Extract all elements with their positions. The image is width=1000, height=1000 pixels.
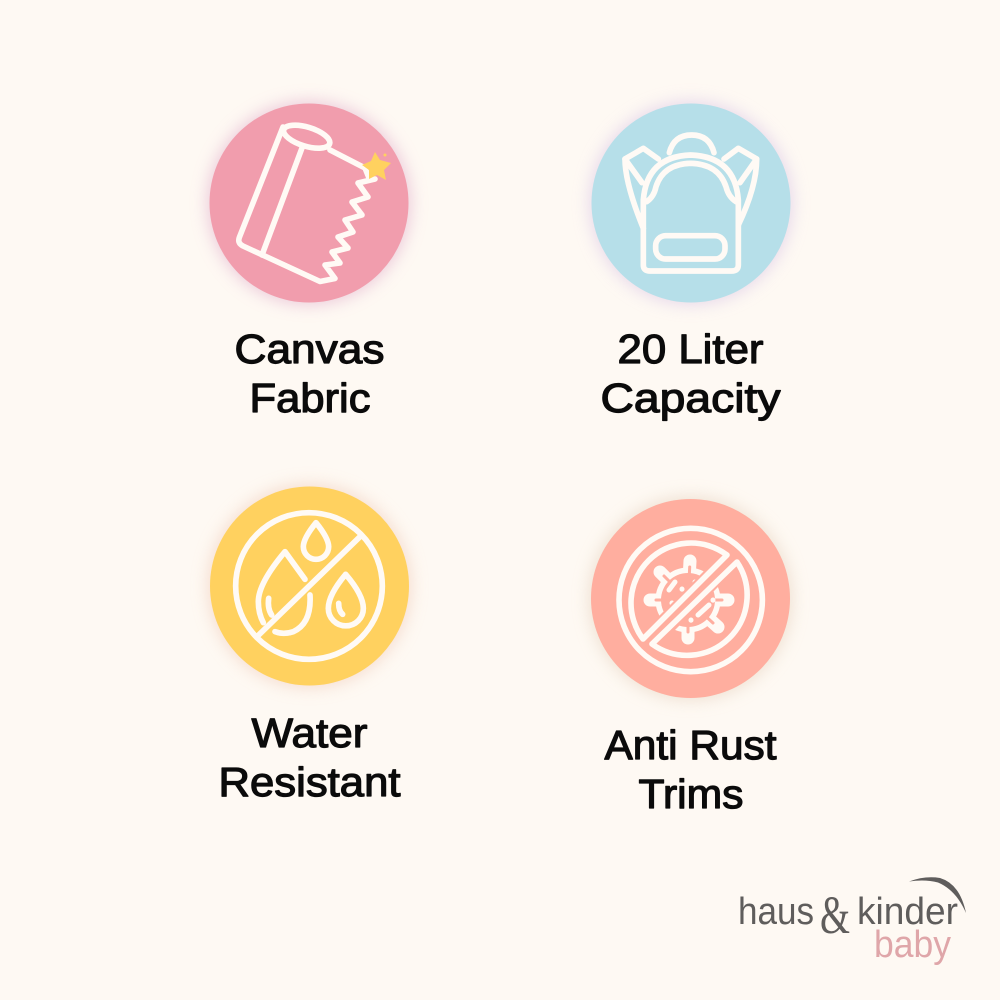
logo ampersand: & [820, 885, 850, 945]
heading: Canvas Fabric: Fabric [250, 375, 370, 421]
icon: crossed-out virus [619, 528, 762, 672]
panel: 20 liter capacity [589, 101, 793, 421]
icon: crossed-out water drops [236, 513, 382, 659]
heading: 20 Liter Capacity: Capacity [600, 375, 781, 421]
heading: Water Resistant: Water [252, 710, 368, 756]
heading: Canvas Fabric: Canvas [234, 326, 384, 372]
logo arc [909, 877, 966, 913]
virus outline layer [650, 561, 728, 638]
panel: canvas fabric [207, 101, 411, 421]
icon: backpack [625, 135, 757, 271]
heading: 20 Liter Capacity: 20 Liter [618, 326, 764, 372]
panel: water resistant [208, 484, 412, 805]
panel: anti rust trims [588, 496, 792, 817]
virus interior layer [656, 567, 722, 632]
virus spots [669, 582, 713, 620]
logo: haus & kinder baby [738, 877, 966, 966]
heading: Water Resistant: Resistant [218, 759, 401, 805]
heading: Anti Rust Trims: Anti Rust [604, 722, 777, 768]
logo wordmark: kinder [857, 891, 958, 933]
heading: Anti Rust Trims: Trims [638, 771, 744, 817]
icon: fabric roll with star [239, 121, 391, 282]
logo wordmark: haus [738, 891, 814, 933]
logo baby: baby [874, 924, 951, 966]
